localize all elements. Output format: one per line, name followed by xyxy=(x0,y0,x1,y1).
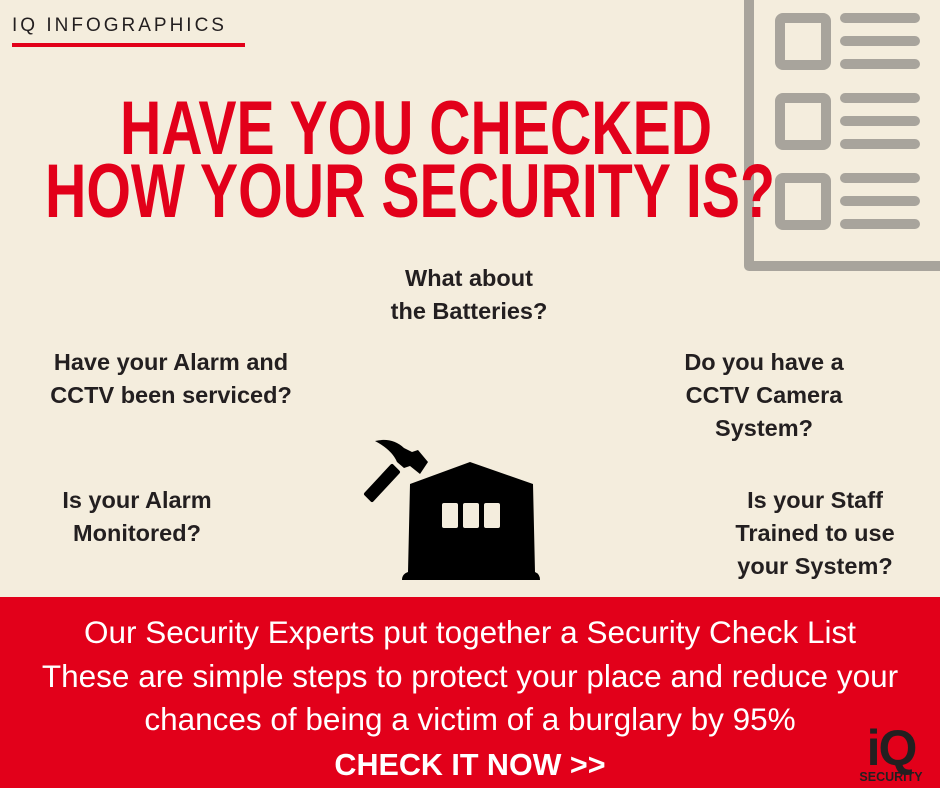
question: serviced xyxy=(50,349,292,408)
question: batteries xyxy=(390,265,547,324)
question: CCTV: CCTV Camera xyxy=(686,382,842,408)
question: serviced: Have your Alarm and xyxy=(54,349,288,375)
question: monitored: Monitored? xyxy=(73,520,201,546)
text: description: Our Security Experts put together a Security Check List xyxy=(84,614,856,650)
logo: IQ security: iQ xyxy=(867,720,915,776)
icon: house with hammer xyxy=(364,440,540,580)
question: CCTV: System? xyxy=(715,415,813,441)
question: staff: your System? xyxy=(737,553,893,579)
title xyxy=(45,86,775,230)
question: monitored: Is your Alarm xyxy=(62,487,212,513)
panel: footer banner: These are simple steps to protect your place and reduce your xyxy=(42,658,898,694)
question: serviced: CCTV been serviced? xyxy=(50,382,292,408)
question: CCTV xyxy=(684,349,844,441)
panel: footer banner xyxy=(0,597,940,788)
question: staff: Is your Staff xyxy=(747,487,883,513)
logo: IQ security xyxy=(859,720,923,784)
panel: footer banner: chances of being a victim of a burglary by 95% xyxy=(144,701,796,737)
brand label: IQ INFOGRAPHICS xyxy=(12,15,227,36)
logo: IQ security: SECURITY xyxy=(859,770,923,784)
icon: checklist xyxy=(744,0,940,271)
brand label xyxy=(12,15,245,47)
call to action: CHECK IT NOW >> xyxy=(334,748,606,782)
question: batteries: the Batteries? xyxy=(391,298,547,324)
question: CCTV: Do you have a xyxy=(684,349,844,375)
question: staff: Trained to use xyxy=(735,520,895,546)
question: staff xyxy=(735,487,895,579)
question: batteries: What about xyxy=(405,265,533,291)
question: monitored xyxy=(62,487,212,546)
